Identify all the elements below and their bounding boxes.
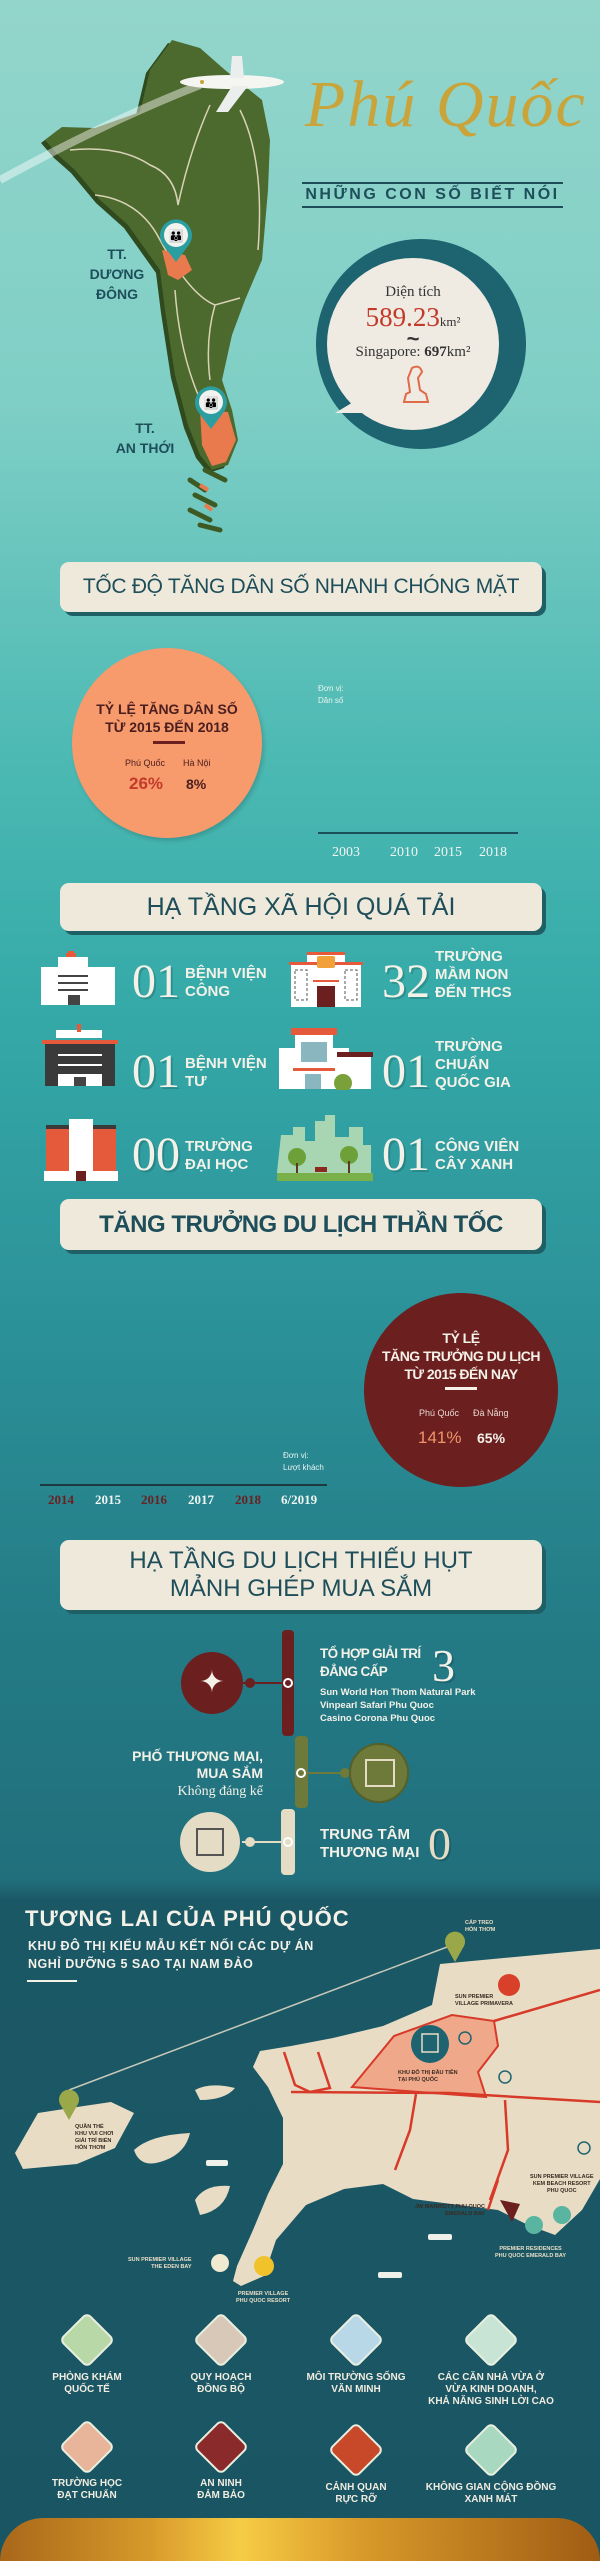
text: entertainment complex: Casino Corona Phu Quoc: [320, 1713, 435, 1724]
panel: tourism growth circle: TỪ 2015 ĐẾN NAY: [404, 1366, 518, 1382]
icon: public hospital: [41, 951, 115, 1005]
map labels: KEM BEACH RESORT: [533, 2181, 591, 2187]
feature grid: CẢNH QUAN: [325, 2482, 387, 2493]
label: TT Duong Dong: TT.: [107, 246, 127, 262]
icon: merlion: [402, 366, 430, 403]
map labels: PREMIER VILLAGE: [238, 2291, 288, 2297]
pin: Duong Dong: 👪: [169, 229, 184, 243]
map labels: PHU QUOC: [547, 2188, 577, 2194]
stat: private hospital: BỆNH VIỆN: [185, 1055, 267, 1072]
stat: universities: [132, 1128, 253, 1181]
chart: tourism: 2018: [235, 1492, 261, 1507]
map labels: QUẦN THỂ: [75, 2124, 104, 2130]
label: TT An Thoi: TT.: [135, 420, 155, 436]
label: TT Duong Dong: DƯƠNG: [90, 266, 144, 282]
panel: population growth circle: TỶ LỆ TĂNG DÂN SỐ: [96, 701, 238, 717]
icon: airplane: [0, 56, 284, 184]
heading: social infrastructure: [60, 883, 542, 931]
feature grid: ĐẢM BẢO: [197, 2490, 245, 2501]
stat: private hospital: TƯ: [185, 1073, 207, 1090]
map labels: VILLAGE PRIMAVERA: [455, 2001, 513, 2007]
map labels: CÁP TREO: [465, 1920, 493, 1926]
panel: population growth circle: Phú Quốc: [125, 758, 165, 768]
heading: tourism growth: [60, 1199, 542, 1250]
text: shopping street: PHỐ THƯƠNG MẠI,: [132, 1748, 263, 1764]
stat: national standard school: CHUẨN: [435, 1056, 489, 1073]
text: TRƯỜNG: [435, 948, 503, 965]
map: Phu Quoc island: [41, 40, 270, 532]
map labels: THE EDEN BAY: [151, 2264, 192, 2270]
chart: population: 2010: [390, 845, 418, 860]
heading: population: TỐC ĐỘ TĂNG DÂN SỐ NHANH CHÓNG MẶT: [83, 575, 519, 598]
feature grid: QUY HOẠCH: [191, 2372, 251, 2383]
feature: landscape: [328, 2422, 384, 2478]
text: entertainment complex: Vinpearl Safari Phu Quoc: [320, 1700, 434, 1711]
feature grid: CÁC CĂN NHÀ VỪA Ở: [438, 2372, 544, 2383]
icon: university: [44, 1119, 118, 1181]
stat: national standard school: QUỐC GIA: [435, 1074, 511, 1091]
map labels: GIẢI TRÍ BIỂN: [75, 2138, 111, 2144]
map labels: [75, 1919, 594, 2304]
stat: public hospital: [132, 955, 267, 1008]
feature: shophouses: [463, 2312, 519, 2368]
feature grid: MÔI TRƯỜNG SỐNG: [306, 2372, 406, 2383]
stat: private hospital: [132, 1045, 267, 1098]
heading: tourism infrastructure: [60, 1540, 542, 1610]
stat: universities: 00: [132, 1128, 180, 1181]
feature: security: [193, 2419, 249, 2475]
icon: entertainment: [181, 1652, 243, 1714]
panel: tourism growth circle: 141%: [418, 1428, 461, 1447]
stat: national standard school: [382, 1038, 511, 1098]
chart: tourism: Đơn vị:: [283, 1451, 309, 1460]
heading: social infrastructure: HẠ TẦNG XÃ HỘI QUÁ TẢI: [147, 893, 455, 921]
heading: tourism infrastructure: MẢNH GHÉP MUA SẮM: [170, 1575, 432, 1602]
panel: population growth circle: 26%: [129, 774, 163, 793]
text: entertainment complex: Sun World Hon Thom Natural Park: [320, 1687, 476, 1698]
map labels: HÒN THƠM: [465, 1927, 495, 1933]
map labels: PHU QUOC EMERALD BAY: [495, 2253, 566, 2259]
feature grid: ĐỒNG BỘ: [197, 2384, 245, 2395]
feature grid: AN NINH: [200, 2478, 242, 2489]
stat: private hospital: 01: [132, 1045, 180, 1098]
stat: public hospital: 01: [132, 955, 180, 1008]
heading: future: TƯƠNG LAI CỦA PHÚ QUỐC: [25, 1906, 350, 1931]
heading: population: [60, 562, 542, 612]
feature grid: XANH MÁT: [465, 2494, 517, 2505]
chart: population: [318, 684, 518, 860]
feature: planning: [193, 2312, 249, 2368]
chart: population: 2018: [479, 845, 507, 860]
map labels: KHU VUI CHƠI: [75, 2131, 113, 2137]
panel: tourism growth circle: 65%: [477, 1430, 505, 1446]
feature grid: VỪA KINH DOANH,: [445, 2384, 537, 2395]
map labels: SUN PREMIER: [455, 1994, 493, 2000]
stat: universities: TRƯỜNG: [185, 1138, 253, 1155]
label: TT An Thoi: [116, 420, 174, 456]
chart: population: 2015: [434, 845, 462, 860]
footer: gold band: [0, 2518, 600, 2561]
panel: tourism growth circle: TĂNG TRƯỞNG DU LỊCH: [382, 1348, 540, 1364]
stat: national standard school: 01: [382, 1045, 430, 1098]
subtitle: NHỮNG CON SỐ BIẾT NÓI: [305, 186, 560, 203]
feature: environment: [328, 2312, 384, 2368]
panel: tourism growth circle: TỶ LỆ: [442, 1330, 480, 1346]
feature grid: KHÔNG GIAN CỘNG ĐỒNG: [426, 2482, 556, 2493]
panel: tourism growth circle: Phú Quốc: [419, 1408, 459, 1418]
chart: tourism: 6/2019: [281, 1492, 317, 1507]
stat: park: 01: [382, 1128, 430, 1181]
chart: tourism: [40, 1451, 327, 1507]
subtitle: [302, 182, 563, 208]
panel: population growth circle: Hà Nội: [183, 758, 211, 768]
stat: public hospital: BỆNH VIỆN: [185, 965, 267, 982]
heading: future: NGHỈ DƯỠNG 5 SAO TẠI NAM ĐẢO: [28, 1957, 253, 1971]
label: TT Duong Dong: [90, 246, 144, 302]
callout: area: Singapore: 697km²: [356, 344, 470, 360]
icon: shop: [349, 1743, 409, 1803]
pin: An Thoi: [195, 386, 227, 429]
text: trade center: [320, 1818, 452, 1869]
chart: population: 2003: [332, 845, 360, 860]
stat: schools: 32: [382, 955, 430, 1008]
text: trade center: TRUNG TÂM: [320, 1826, 410, 1843]
panel: tourism growth circle: [364, 1293, 558, 1487]
chart: tourism: 2015: [95, 1492, 121, 1507]
feature: green space: [463, 2422, 519, 2478]
text: shopping street: [132, 1748, 263, 1799]
feature grid: QUỐC TẾ: [64, 2384, 110, 2395]
callout: area: [316, 239, 526, 449]
stat: schools: ĐẾN THCS: [435, 984, 512, 1001]
text: entertainment complex: ĐẲNG CẤP: [320, 1664, 387, 1679]
callout: area: 589.23km²: [366, 302, 460, 332]
map labels: SUN PREMIER VILLAGE: [128, 2257, 192, 2263]
icon: private hospital: [42, 1024, 118, 1086]
stat: public hospital: CÔNG: [185, 983, 230, 1000]
panel: tourism growth circle: Đà Nẵng: [473, 1408, 509, 1418]
text: trade center: 0: [428, 1818, 451, 1869]
icon: kindergarten school: [289, 952, 363, 1007]
pin: Duong Dong: [160, 219, 192, 262]
feature grid: PHÒNG KHÁM: [52, 2372, 122, 2383]
feature grid: VĂN MINH: [331, 2384, 381, 2395]
stat: schools: MẦM NON: [435, 966, 508, 983]
icon: national school: [279, 1028, 373, 1090]
callout: area: Diện tích: [385, 284, 441, 300]
map labels: JW MARRIOTT PHU QUOC: [415, 2204, 485, 2210]
text: shopping street: MUA SẮM: [197, 1765, 263, 1781]
map labels: KHU ĐÔ THỊ ĐẦU TIÊN: [398, 2070, 458, 2076]
map labels: SUN PREMIER VILLAGE: [530, 2174, 594, 2180]
heading: tourism infrastructure: HẠ TẦNG DU LỊCH THIẾU HỤT: [129, 1547, 473, 1574]
feature grid: [52, 2314, 556, 2505]
text: entertainment complex: 3: [432, 1640, 455, 1691]
stat: park: CÔNG VIÊN: [435, 1138, 519, 1155]
feature grid: RỰC RỠ: [335, 2494, 377, 2505]
heading: future: [25, 1906, 350, 1982]
map labels: PHU QUOC RESORT: [236, 2298, 290, 2304]
chart: population: Đơn vị:: [318, 684, 344, 693]
text: shopping street: Không đáng kể: [177, 1784, 263, 1799]
map labels: TẠI PHÚ QUỐC: [398, 2077, 438, 2083]
stat: park: [382, 1128, 519, 1181]
panel: population growth circle: TỪ 2015 ĐẾN 2018: [105, 719, 229, 735]
heading: tourism growth: TĂNG TRƯỞNG DU LỊCH THẦN TỐC: [99, 1211, 503, 1238]
label: TT An Thoi: AN THỚI: [116, 440, 174, 456]
text: trade center: THƯƠNG MẠI: [320, 1844, 419, 1861]
panel: population growth circle: [72, 648, 262, 838]
feature grid: TRƯỜNG HỌC: [52, 2478, 122, 2489]
feature: clinic: [59, 2312, 115, 2368]
text: entertainment complex: TỔ HỢP GIẢI TRÍ: [320, 1646, 421, 1661]
panel: population growth circle: 8%: [186, 776, 206, 792]
chart: tourism: 2014: [48, 1492, 74, 1507]
map labels: EMERALD BAY: [445, 2211, 485, 2217]
pin: An Thoi: 👪: [204, 396, 219, 410]
title: Phú Quốc: [305, 68, 587, 141]
chart: tourism: 2016: [141, 1492, 167, 1507]
icon: park: [277, 1115, 373, 1181]
stat: schools: [382, 948, 512, 1008]
feature grid: KHẢ NĂNG SINH LỜI CAO: [428, 2396, 554, 2407]
text: entertainment complex: [320, 1640, 476, 1724]
heading: future: KHU ĐÔ THỊ KIỂU MẪU KẾT NỐI CÁC DỰ ÁN: [28, 1939, 314, 1953]
feature grid: ĐẠT CHUẨN: [57, 2490, 117, 2501]
label: TT Duong Dong: ĐÔNG: [96, 286, 138, 302]
timeline: tourism infrastructure: [242, 1630, 350, 1875]
feature: school: [59, 2419, 115, 2475]
icon: mall: [180, 1812, 240, 1872]
map labels: PREMIER RESIDENCES: [499, 2246, 562, 2252]
stat: park: CÂY XANH: [435, 1156, 513, 1173]
map labels: HÒN THƠM: [75, 2145, 105, 2151]
stat: universities: ĐẠI HỌC: [185, 1156, 248, 1173]
text: TRƯỜNG: [435, 1038, 503, 1055]
chart: tourism: Lượt khách: [283, 1463, 324, 1472]
callout: area: ~: [407, 326, 419, 351]
chart: population: Dân số: [318, 696, 343, 705]
chart: tourism: 2017: [188, 1492, 214, 1507]
map: southern Phu Quoc: [15, 1932, 600, 2286]
icon: entertainment: ✦: [199, 1666, 225, 1699]
